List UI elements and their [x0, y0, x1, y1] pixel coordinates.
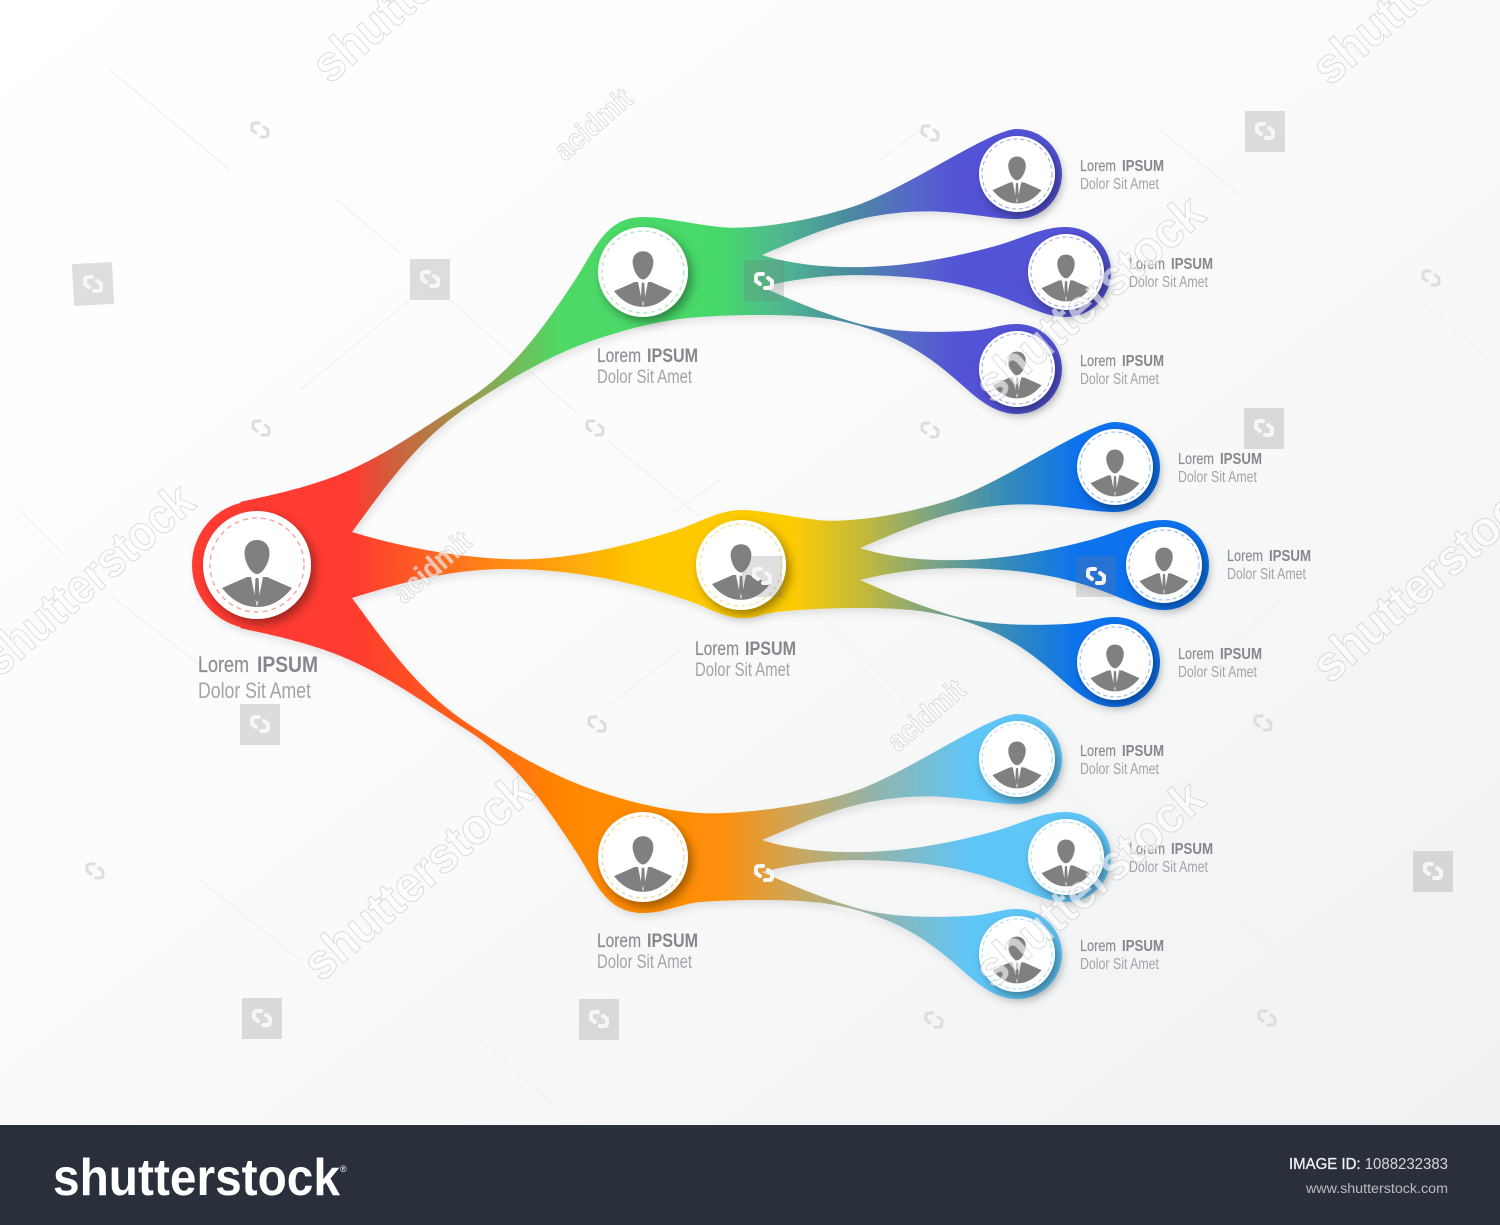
footer image id: IMAGE ID: 1088232383	[1289, 1156, 1448, 1173]
label: purple 1	[1080, 158, 1164, 193]
label: purple 1: Dolor Sit Amet	[1080, 176, 1159, 193]
watermark: diagonal text: acidmit	[548, 82, 639, 167]
label: light blue 3: IPSUM	[1122, 938, 1164, 955]
label: root	[198, 652, 318, 703]
footer bar	[0, 1125, 1500, 1225]
label: purple 3: IPSUM	[1122, 353, 1164, 370]
label: light blue 3: Dolor Sit Amet	[1080, 956, 1159, 973]
leaf: light blue 1	[979, 721, 1055, 797]
label: blue 1: IPSUM	[1220, 451, 1262, 468]
label: root: Lorem	[198, 652, 249, 677]
label: orange node: Dolor Sit Amet	[597, 952, 693, 973]
leaf: purple 2	[1028, 234, 1104, 310]
footer registered mark: ®	[340, 1164, 347, 1174]
label: yellow node: IPSUM	[745, 639, 796, 660]
node: root	[203, 511, 311, 619]
label: green node	[597, 346, 698, 388]
leaf: purple 3	[979, 331, 1055, 407]
band: middle branch, yellow to blue	[300, 422, 1209, 707]
label: purple 2: Dolor Sit Amet	[1129, 274, 1208, 291]
tree bands	[192, 129, 1209, 999]
label: light blue 1: Dolor Sit Amet	[1080, 761, 1159, 778]
leaf: light blue 3	[979, 916, 1055, 992]
label: blue 2	[1227, 548, 1311, 583]
label: purple 1: IPSUM	[1122, 158, 1164, 175]
label: yellow node	[695, 639, 796, 681]
label: blue 1: Lorem	[1178, 451, 1214, 468]
label: green node: Dolor Sit Amet	[597, 367, 693, 388]
label: blue 3: IPSUM	[1220, 646, 1262, 663]
label: light blue 2: IPSUM	[1171, 841, 1213, 858]
band: root blob	[192, 501, 352, 629]
label: purple 2	[1129, 256, 1213, 291]
label: orange node	[597, 931, 698, 973]
leaf: blue 2	[1126, 527, 1202, 603]
band: bottom branch, orange to light blue	[240, 565, 1111, 999]
watermark: diagonal text: acidmit	[881, 673, 972, 758]
label: blue 2: IPSUM	[1269, 548, 1311, 565]
watermark: small swirl marks	[87, 123, 1439, 1027]
footer logo: shutterstock	[53, 1149, 340, 1207]
watermark: diagonal text: acidmit	[387, 525, 478, 610]
label: blue 2: Lorem	[1227, 548, 1263, 565]
label: light blue 1: Lorem	[1080, 743, 1116, 760]
label: light blue 3	[1080, 938, 1164, 973]
label: blue 3	[1178, 646, 1262, 681]
label: purple 2: Lorem	[1129, 256, 1165, 273]
watermark: translucent squares	[72, 111, 1453, 1040]
leaf: blue 1	[1077, 429, 1153, 505]
label: blue 1: Dolor Sit Amet	[1178, 469, 1257, 486]
label: green node: IPSUM	[647, 346, 698, 367]
label: blue 1	[1178, 451, 1262, 486]
leaf: blue 3	[1077, 624, 1153, 700]
node: green	[598, 227, 688, 317]
label: purple 3: Dolor Sit Amet	[1080, 371, 1159, 388]
label: blue 2: Dolor Sit Amet	[1227, 566, 1306, 583]
label: blue 3: Dolor Sit Amet	[1178, 664, 1257, 681]
label: purple 3: Lorem	[1080, 353, 1116, 370]
label: blue 3: Lorem	[1178, 646, 1214, 663]
label: root: IPSUM	[257, 652, 318, 677]
watermark: diagonal text: shutterstock	[291, 762, 543, 991]
node: orange	[598, 812, 688, 902]
label: light blue 1: IPSUM	[1122, 743, 1164, 760]
watermark: diagonal text: shutterstock	[963, 769, 1215, 998]
label: purple 2: IPSUM	[1171, 256, 1213, 273]
footer website: www.shutterstock.com	[1305, 1180, 1448, 1196]
label: purple 1: Lorem	[1080, 158, 1116, 175]
label: yellow node: Dolor Sit Amet	[695, 660, 791, 681]
leaf: light blue 2	[1028, 819, 1104, 895]
label: purple 3	[1080, 353, 1164, 388]
label: orange node: IPSUM	[647, 931, 698, 952]
label: green node: Lorem	[597, 346, 641, 367]
label: light blue 2: Lorem	[1129, 841, 1165, 858]
label: orange node: Lorem	[597, 931, 641, 952]
label: root: Dolor Sit Amet	[198, 678, 311, 703]
label: yellow node: Lorem	[695, 639, 739, 660]
band: top branch, green to purple	[240, 129, 1111, 565]
label: light blue 2: Dolor Sit Amet	[1129, 859, 1208, 876]
node: yellow	[696, 520, 786, 610]
label: light blue 1	[1080, 743, 1164, 778]
leaf: purple 1	[979, 136, 1055, 212]
label: light blue 2	[1129, 841, 1213, 876]
label: light blue 3: Lorem	[1080, 938, 1116, 955]
watermark: diagonal text: shutterstock	[963, 184, 1215, 413]
